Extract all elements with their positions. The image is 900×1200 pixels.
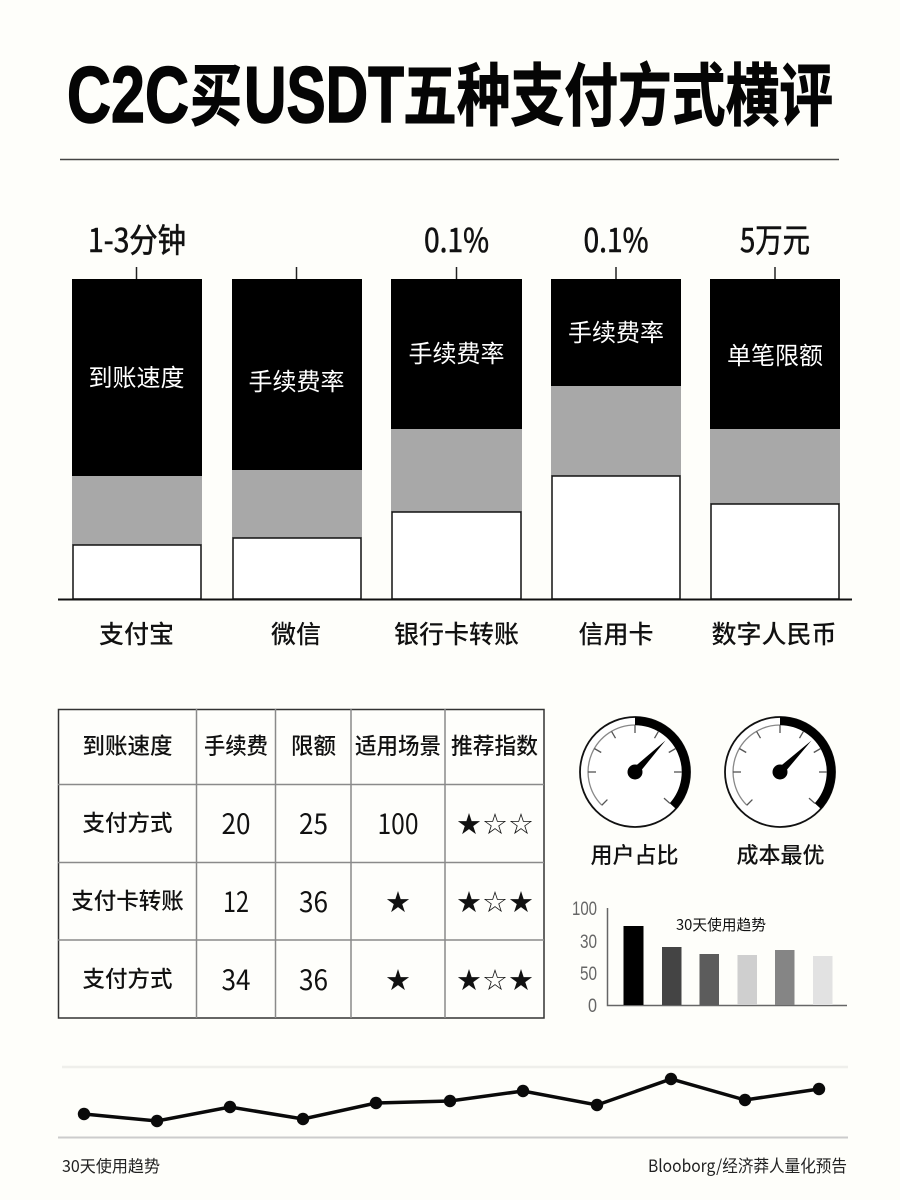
bar: 微信: 手续费率: [248, 362, 344, 397]
bar: 数字人民币: 单笔限额: [727, 336, 823, 371]
small bar chart: 30天使用趋势: 50: [580, 964, 597, 985]
table row 2: ★: [385, 885, 411, 919]
comparison table: [58, 709, 544, 1018]
table header row: [82, 729, 538, 761]
line chart: 30-day trend: [58, 1067, 848, 1138]
table row 3: 36: [299, 959, 328, 999]
bar: 信用卡: 信用卡: [578, 615, 654, 651]
small bar chart: 30天使用趋势: 100: [572, 899, 597, 920]
table header row: 限额: [291, 729, 336, 761]
bar: 支付宝: 到账速度: [88, 358, 184, 393]
table row 3: ★☆★: [456, 963, 534, 997]
table row 1: 支付方式: [82, 806, 173, 838]
table row 3: 支付方式: [82, 962, 173, 994]
bar: 支付宝: 支付宝: [99, 615, 174, 651]
table header row: 推荐指数: [451, 729, 538, 761]
table row 1: 25: [299, 803, 328, 843]
bar: 微信: [232, 267, 362, 651]
table header row: 手续费: [204, 729, 268, 761]
table row 2: 12: [223, 881, 249, 921]
bar: 银行卡转账: [391, 214, 522, 651]
table row 2: 36: [299, 881, 328, 921]
footer: chart caption: 30天使用趋势: [62, 1153, 160, 1177]
stacked bar chart: payment methods: [58, 214, 852, 651]
table header row: 到账速度: [82, 729, 173, 761]
bar: 信用卡: [551, 214, 681, 651]
bar: 支付宝: 1-3分钟: [88, 214, 186, 262]
bar: 银行卡转账: 银行卡转账: [394, 615, 519, 651]
table row 2: [71, 881, 534, 921]
bar: 银行卡转账: 0.1%: [424, 214, 489, 262]
table row 1: 20: [222, 803, 250, 843]
bar: 微信: 微信: [271, 615, 321, 651]
bar: 数字人民币: [710, 214, 840, 651]
gauge: 用户占比: [580, 717, 690, 870]
small bar chart: 30天使用趋势: 0: [588, 996, 597, 1017]
bar: 信用卡: 0.1%: [584, 214, 648, 262]
bar: 支付宝: [72, 214, 202, 651]
table row 2: 支付卡转账: [71, 884, 184, 916]
footer: source: Blooborg/经济莽人量化预告: [648, 1152, 847, 1177]
title: [67, 41, 833, 140]
small bar chart: 30天使用趋势: [572, 899, 847, 1017]
gauge: 用户占比: 用户占比: [590, 838, 679, 870]
title: C2C: [67, 50, 189, 139]
table row 3: [82, 959, 534, 999]
title: USDT: [244, 50, 404, 139]
table row 2: ★☆★: [456, 885, 534, 919]
gauge: 成本最优: [725, 717, 835, 870]
table row 3: ★: [385, 963, 411, 997]
table row 1: 100: [378, 803, 418, 843]
bar: 数字人民币: 数字人民币: [711, 615, 837, 651]
table header row: 适用场景: [355, 729, 441, 761]
small bar chart: 30天使用趋势: 30: [580, 932, 597, 953]
title: 买: [190, 41, 242, 140]
table row 1: ★☆☆: [456, 807, 534, 841]
gauge: 成本最优: 成本最优: [736, 838, 825, 870]
table row 1: [82, 803, 534, 843]
small bar chart: 30天使用趋势: 30天使用趋势: [676, 914, 766, 935]
bar: 数字人民币: 5万元: [740, 214, 810, 262]
bar: 信用卡: 手续费率: [568, 313, 664, 348]
table row 3: 34: [222, 959, 250, 999]
bar: 银行卡转账: 手续费率: [408, 334, 504, 369]
